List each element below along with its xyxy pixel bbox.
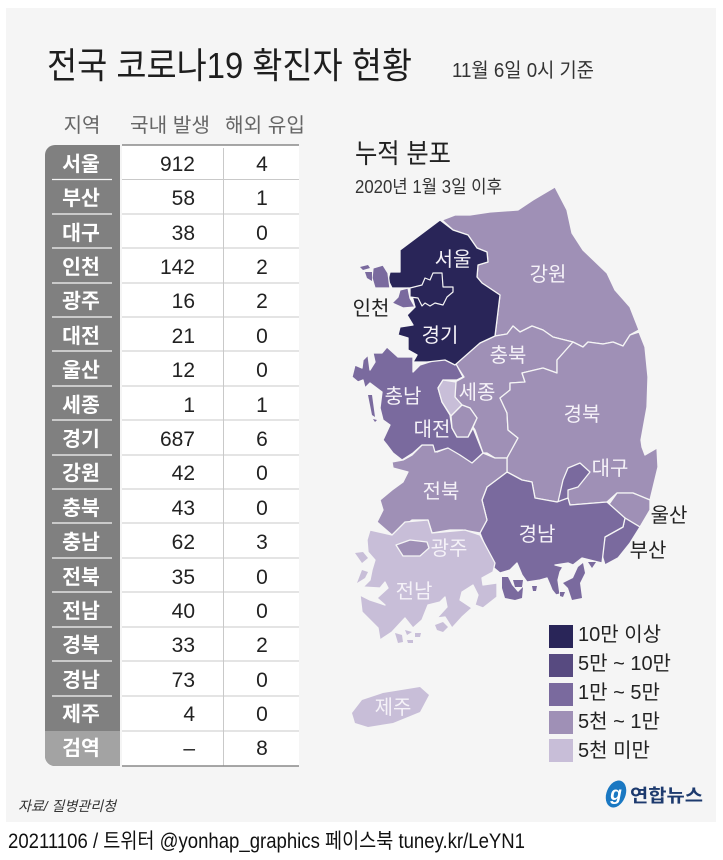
logo: Yonhap News [602,777,703,811]
row labels: 광주 [62,290,100,313]
map labels: 경기 [422,324,458,347]
map labels: 충남 [385,385,421,408]
overseas case values: 0 [256,462,268,485]
quarantine row background [45,731,120,766]
overseas case values: 0 [256,703,268,726]
row labels [62,153,100,760]
region: Daegu [558,463,590,502]
region: Gyeongbuk [500,332,658,505]
overseas case values: 0 [256,669,268,692]
map labels: 대구 [592,457,628,480]
domestic case values: 73 [172,669,195,692]
region: Chungbuk [455,326,573,458]
row labels: 부산 [62,187,100,210]
icon: globe mark: g [609,784,622,805]
region: Gwangju [396,540,429,556]
overseas case values: 2 [256,256,268,279]
overseas case values: 0 [256,325,268,348]
domestic case values: 16 [172,290,195,313]
subtitle: reference date: 11월 6일 0시 기준 [452,59,594,82]
domestic case values: 687 [160,428,195,451]
region: Ulsan [607,493,650,527]
map labels: 인천 [353,297,389,320]
region: Jeonbuk [377,445,507,535]
table: cases by region [45,114,305,766]
domestic case values: 142 [160,256,195,279]
title: 전국 코로나19 확진자 현황 [47,45,412,86]
row labels: 강원 [62,462,100,485]
row labels: 전남 [62,600,100,623]
map labels: 서울 [435,248,471,271]
domestic case values: – [183,737,195,760]
source note: 자료/ 질병관리청 [18,798,118,814]
row labels: 경북 [62,634,100,657]
table header: 국내 발생 [130,114,210,137]
row labels: 경기 [62,428,100,451]
map labels: 전남 [396,580,432,603]
region: Chungnam [352,347,483,463]
domestic case values: 58 [172,187,195,210]
table header: 해외 유입 [225,114,305,137]
domestic case values [160,153,195,760]
row labels: 대구 [62,222,100,245]
overseas case values: 1 [256,394,268,417]
overseas case values: 0 [256,222,268,245]
row labels: 제주 [62,703,100,726]
legend: 5천 미만 [578,739,650,762]
domestic case values: 12 [172,359,195,382]
footer credit: 20211106 / 트위터 @yonhap_graphics 페이스북 tuney.kr/LeYN1 [8,830,525,853]
row labels: 전북 [62,566,100,589]
map labels: 세종 [459,381,495,404]
overseas case values: 0 [256,497,268,520]
overseas case values: 6 [256,428,268,451]
domestic case values: 4 [183,703,195,726]
domestic case values: 35 [172,566,195,589]
overseas case values: 0 [256,359,268,382]
overseas case values: 8 [256,737,268,760]
table rules [122,148,299,766]
overseas case values: 1 [256,187,268,210]
map labels: 충북 [490,344,526,367]
overseas case values: 4 [256,153,268,176]
region column background [45,145,120,766]
table top and bottom rules [122,145,299,766]
row labels: 인천 [62,256,100,279]
legend [549,623,671,762]
overseas case values: 0 [256,566,268,589]
region: Daejeon [451,405,477,437]
overseas case values: 2 [256,634,268,657]
row labels: 충남 [62,531,100,554]
region: Incheon [360,265,415,308]
row labels: 검역 [62,737,100,760]
map labels: 대전 [414,418,450,441]
region: Gyeongnam [480,472,625,600]
choropleth map of South Korea [352,187,687,727]
region separators [52,180,112,696]
domestic case values: 33 [172,634,195,657]
overseas case values: 0 [256,600,268,623]
region: Busan [602,518,640,565]
row labels: 울산 [62,359,100,382]
map labels: 부산 [630,539,666,562]
legend: 10만 이상 [578,623,661,646]
value cells background [122,145,299,766]
legend: 5만 ~ 10만 [578,652,671,675]
domestic case values: 42 [172,462,195,485]
map labels: 제주 [375,696,411,719]
overseas case values: 3 [256,531,268,554]
row labels: 대전 [62,325,100,348]
legend: 1만 ~ 5만 [578,681,660,704]
region: Seoul [410,273,453,306]
domestic case values: 40 [172,600,195,623]
map labels: 강원 [530,263,566,286]
region: Sejong [438,380,462,416]
domestic case values: 62 [172,531,195,554]
region: Jeonnam [355,520,497,643]
row labels: 세종 [62,394,100,417]
row labels: 서울 [62,153,100,176]
overseas case values: 2 [256,290,268,313]
region: Gangwon [442,187,639,347]
map subheading: 2020년 1월 3일 이후 [355,177,502,197]
map heading: 누적 분포 [355,139,451,169]
map labels: 광주 [431,537,467,560]
overseas case values [256,153,268,760]
table header [64,114,305,137]
map labels: 경북 [564,403,600,426]
domestic case values: 912 [160,153,195,176]
table header: 지역 [64,114,100,137]
map labels: 울산 [651,504,687,527]
domestic case values: 43 [172,497,195,520]
row labels: 경남 [62,669,100,692]
legend: 5천 ~ 1만 [578,710,660,733]
domestic case values: 38 [172,222,195,245]
domestic case values: 1 [183,394,195,417]
row labels: 충북 [62,497,100,520]
map labels: 전북 [423,480,459,503]
region: Gyeonggi [388,220,500,365]
map labels [353,248,687,719]
logo: Yonhap News: 연합뉴스 [630,786,703,806]
region: Jeju [352,687,429,727]
map labels: 경남 [519,523,555,546]
domestic case values: 21 [172,325,195,348]
